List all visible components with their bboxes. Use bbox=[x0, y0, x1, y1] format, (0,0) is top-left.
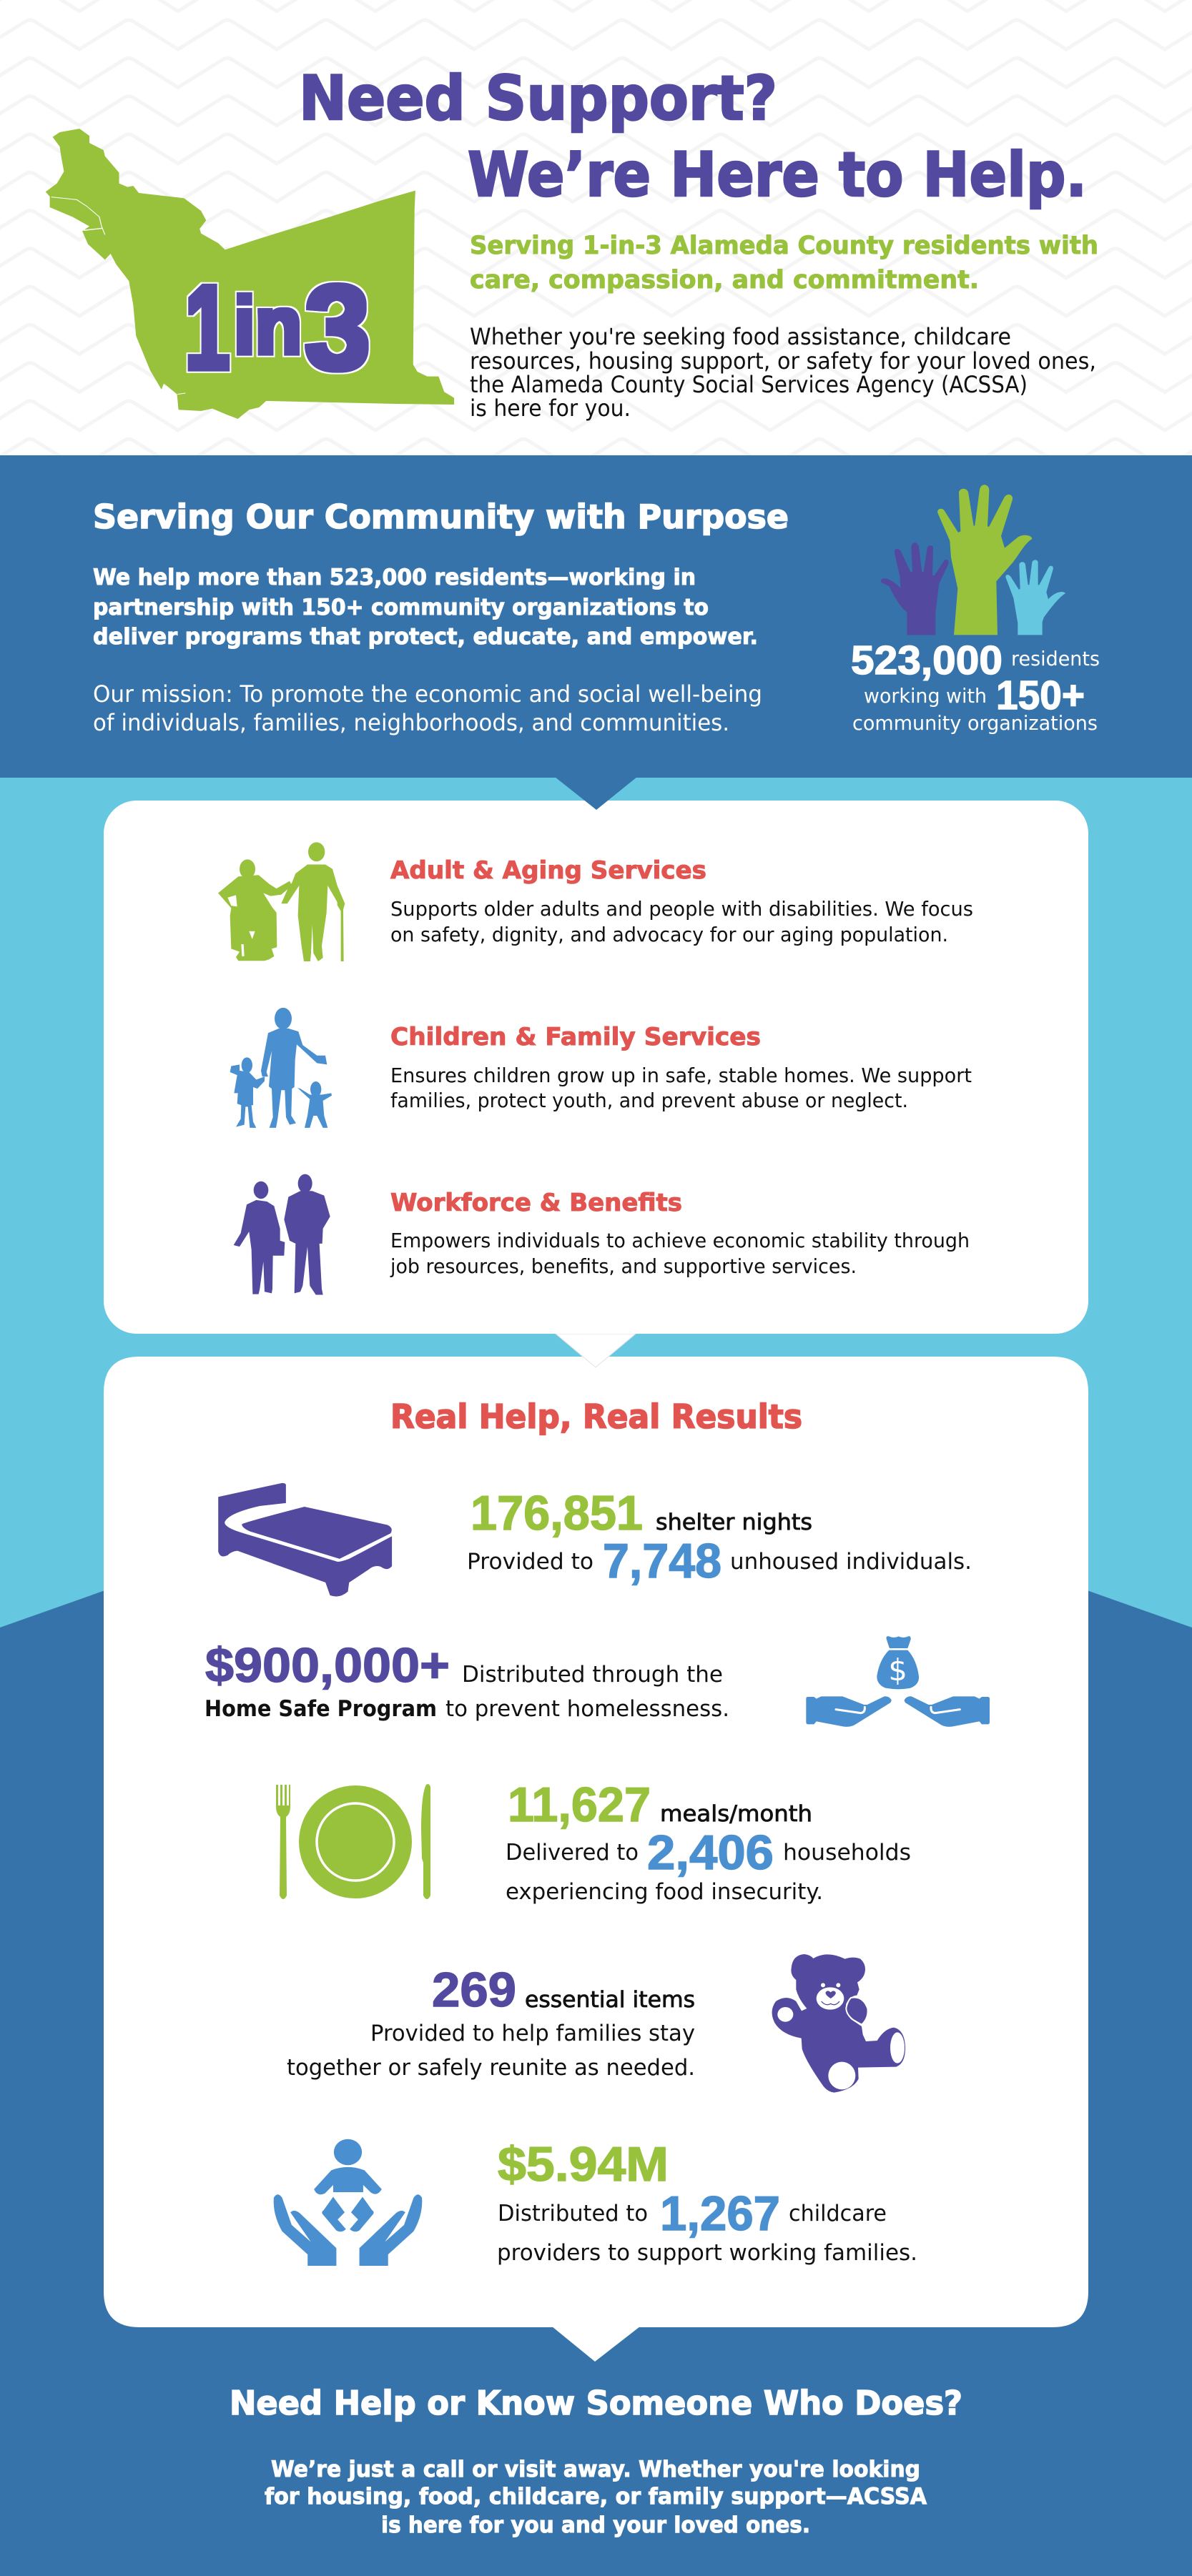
icon: two working adults bbox=[234, 1174, 330, 1295]
mission statement bbox=[93, 680, 762, 736]
stat: essential items: together or safely reunite as needed. bbox=[287, 2055, 695, 2081]
description: job resources, benefits, and supportive services. bbox=[390, 1254, 857, 1278]
stat: shelter nights: 7,748 bbox=[603, 1534, 721, 1588]
description: families, protect youth, and prevent abuse or neglect. bbox=[390, 1089, 908, 1112]
stat: Home Safe Program: Home Safe Program bbox=[205, 1696, 437, 1722]
title: We’re Here to Help. bbox=[468, 139, 1087, 211]
stat: meals per month: 11,627 bbox=[508, 1778, 651, 1832]
description: on safety, dignity, and advocacy for our aging population. bbox=[390, 923, 948, 946]
stat: shelter nights: shelter nights bbox=[656, 1510, 812, 1535]
intro text: is here for you. bbox=[470, 395, 631, 422]
stat: shelter nights: unhoused individuals. bbox=[730, 1549, 972, 1575]
header panel bbox=[46, 63, 1098, 422]
stat: essential items: Provided to help families stay bbox=[370, 2021, 695, 2046]
text block: We’re just a call or visit away. Whether you're looking bbox=[271, 2457, 920, 2482]
green subtitle: care, compassion, and commitment. bbox=[470, 266, 979, 294]
stat: meals per month bbox=[276, 1778, 911, 1905]
stats: community organizations bbox=[852, 711, 1098, 735]
icon: money bag and hands: $ bbox=[888, 1653, 907, 1688]
description: Empowers individuals to achieve economic stability through bbox=[390, 1229, 970, 1252]
panel: services card bbox=[104, 777, 1088, 1367]
icon: bed bbox=[218, 1483, 392, 1597]
panel: serving our community bbox=[0, 455, 1192, 778]
pointer overlap bbox=[556, 1334, 636, 1367]
stat: Home Safe Program: Distributed through the bbox=[462, 1662, 723, 1688]
bold description: We help more than 523,000 residents—working in bbox=[93, 565, 696, 590]
icon: mother and two children bbox=[230, 1008, 332, 1128]
service: workforce and benefits bbox=[234, 1174, 970, 1295]
text block: for housing, food, childcare, or family support—ACSSA bbox=[265, 2484, 927, 2510]
green subtitle bbox=[470, 232, 1098, 294]
stats: residents bbox=[1011, 647, 1100, 670]
stat: essential items: 269 bbox=[432, 1963, 516, 2017]
text block bbox=[265, 2457, 927, 2538]
arrow: from blue panel bbox=[555, 777, 637, 810]
stat: Home Safe Program: $900,000+ bbox=[205, 1638, 450, 1693]
stat: childcare providers: $5.94M bbox=[498, 2137, 669, 2191]
heading: Need Help or Know Someone Who Does? bbox=[230, 2384, 962, 2422]
text block: is here for you and your loved ones. bbox=[381, 2512, 810, 2538]
description bbox=[390, 1229, 970, 1278]
heading: Children & Family Services bbox=[390, 1023, 761, 1051]
icon: baby in caring hands bbox=[274, 2139, 422, 2266]
arrow: card pointer bbox=[555, 1333, 636, 1367]
1 in 3 text: 3 bbox=[305, 260, 370, 395]
stats bbox=[851, 638, 1100, 735]
description bbox=[390, 897, 973, 946]
mission statement: Our mission: To promote the economic and social well-being bbox=[93, 680, 762, 708]
icon: wheelchair and older adult bbox=[218, 842, 345, 961]
stat: meals per month: Delivered to bbox=[506, 1840, 639, 1866]
icon: raised hands bbox=[881, 485, 1065, 635]
intro text bbox=[470, 323, 1096, 422]
heading: Real Help, Real Results bbox=[390, 1397, 802, 1436]
arrow: card pointer to footer bbox=[552, 2327, 640, 2362]
stat: childcare providers bbox=[274, 2137, 917, 2266]
stat: essential items: essential items bbox=[525, 1987, 695, 2013]
bold description bbox=[93, 565, 758, 650]
bold description: deliver programs that protect, educate, and empower. bbox=[93, 624, 758, 650]
1 in 3 text bbox=[185, 260, 370, 395]
icon: plate with fork and knife bbox=[276, 1784, 430, 1899]
stat: meals per month: households bbox=[783, 1840, 911, 1866]
icon: money bag and hands bbox=[806, 1636, 990, 1727]
service: children and family bbox=[230, 1008, 972, 1128]
stats: working with bbox=[864, 684, 987, 708]
description: Ensures children grow up in safe, stable homes. We support bbox=[390, 1064, 972, 1087]
map of Alameda County with 1 in 3 bbox=[46, 129, 454, 419]
intro text: the Alameda County Social Services Agency (ACSSA) bbox=[470, 371, 1028, 398]
bold description: partnership with 150+ community organizations to bbox=[93, 595, 709, 620]
stat: Home Safe Program: to prevent homelessness. bbox=[445, 1696, 729, 1722]
intro text: Whether you're seeking food assistance, childcare bbox=[470, 323, 1011, 350]
stat: childcare providers: childcare bbox=[789, 2201, 887, 2226]
panel: footer call to action bbox=[230, 2384, 962, 2538]
heading: Serving Our Community with Purpose bbox=[93, 497, 789, 536]
stat: childcare providers: providers to support working families. bbox=[497, 2240, 917, 2266]
1 in 3 text: in bbox=[234, 281, 302, 370]
stat: Home Safe Program bbox=[205, 1636, 990, 1727]
green subtitle: Serving 1-in-3 Alameda County residents with bbox=[470, 232, 1098, 260]
description bbox=[390, 1064, 972, 1112]
stat: meals per month: experiencing food insecurity. bbox=[506, 1879, 823, 1905]
stat: shelter nights: 176,851 bbox=[471, 1486, 643, 1540]
stat: shelter nights bbox=[218, 1483, 972, 1597]
stat: childcare providers: Distributed to bbox=[498, 2201, 648, 2226]
stat: meals per month: meals/month bbox=[660, 1801, 812, 1827]
service: adult and aging bbox=[218, 842, 973, 961]
description: Supports older adults and people with disabilities. We focus bbox=[390, 897, 973, 921]
intro text: resources, housing support, or safety for your loved ones, bbox=[470, 347, 1096, 375]
mission statement: of individuals, families, neighborhoods, and communities. bbox=[93, 709, 729, 736]
1 in 3 text: 1 bbox=[185, 260, 230, 395]
heading: Adult & Aging Services bbox=[390, 856, 706, 885]
county shape bbox=[46, 129, 454, 419]
stat: shelter nights: Provided to bbox=[467, 1549, 593, 1575]
title bbox=[299, 63, 1087, 211]
stats: 150+ bbox=[996, 673, 1085, 718]
stats: 523,000 bbox=[851, 638, 1003, 683]
stat: childcare providers: 1,267 bbox=[660, 2186, 780, 2241]
stat: meals per month: 2,406 bbox=[647, 1826, 774, 1880]
heading: Workforce & Benefits bbox=[390, 1189, 682, 1217]
stat: essential items bbox=[287, 1954, 905, 2093]
icon: teddy bear bbox=[772, 1954, 905, 2093]
panel: real help results card bbox=[104, 1329, 1088, 2362]
title: Need Support? bbox=[299, 63, 777, 134]
